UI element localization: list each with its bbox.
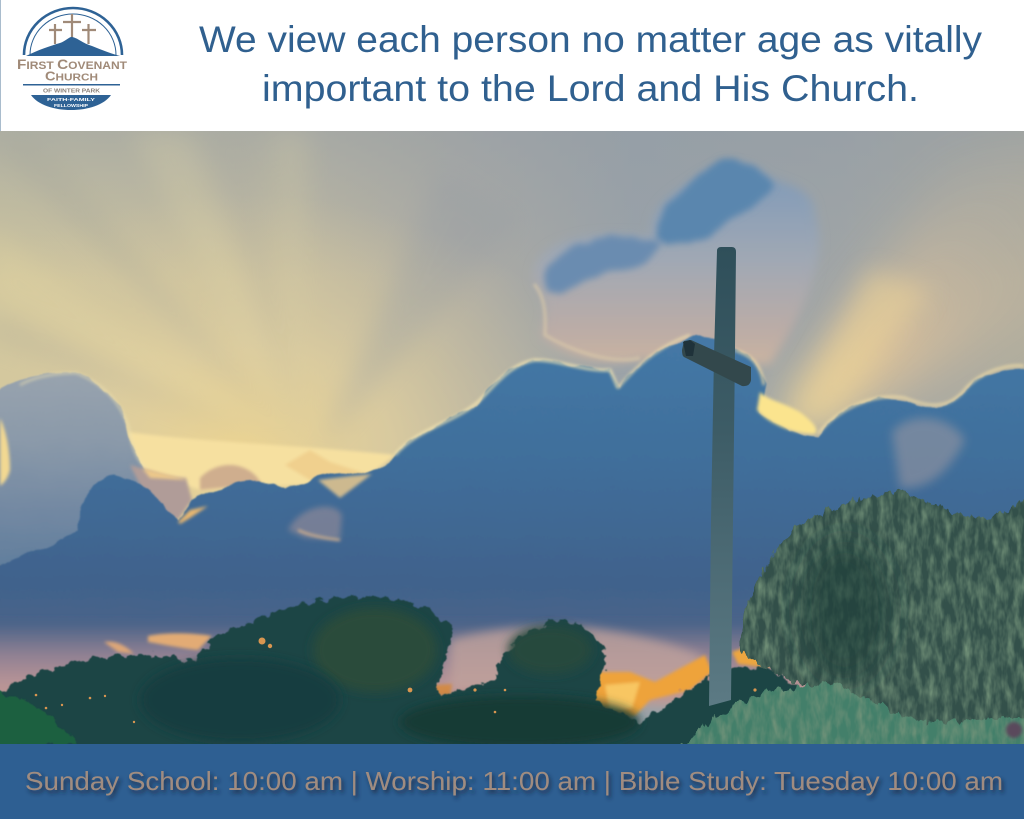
logo: First Covenant Church: FELLOWSHIP bbox=[54, 103, 88, 108]
logo: First Covenant Church: FAITH-FAMILY bbox=[47, 97, 95, 102]
logo: First Covenant Church: FIRST COVENANT bbox=[17, 56, 127, 72]
service times text: Sunday School: 10:00 am | Worship: 11:00 am | Bible Study: Tuesday 10:00 am bbox=[25, 766, 1003, 796]
sky bbox=[0, 131, 1024, 745]
left billowing cloud bbox=[0, 373, 192, 572]
logo: First Covenant Church: OF WINTER PARK bbox=[43, 88, 100, 94]
horizon sky bbox=[0, 620, 806, 709]
tree line bbox=[0, 596, 810, 750]
footer panel: service times bbox=[0, 744, 1024, 819]
photo: sunset sky with clouds and cross bbox=[0, 131, 1024, 750]
grass clump bbox=[738, 492, 1024, 730]
header panel bbox=[0, 0, 1024, 131]
main cloud bank bbox=[0, 335, 1024, 650]
bright horizon band behind clouds bbox=[130, 432, 394, 490]
foreground bushes bbox=[682, 684, 1024, 750]
sunset glow behind trees bbox=[436, 647, 770, 718]
upper cloud behind cross bbox=[533, 160, 819, 365]
logo: First Covenant Church bbox=[17, 8, 127, 110]
heading: We view each person no matter age as vitally bbox=[199, 19, 983, 60]
heading: important to the Lord and His Church. bbox=[262, 68, 919, 109]
wooden cross bbox=[682, 247, 751, 706]
logo: First Covenant Church: CHURCH bbox=[45, 68, 98, 84]
